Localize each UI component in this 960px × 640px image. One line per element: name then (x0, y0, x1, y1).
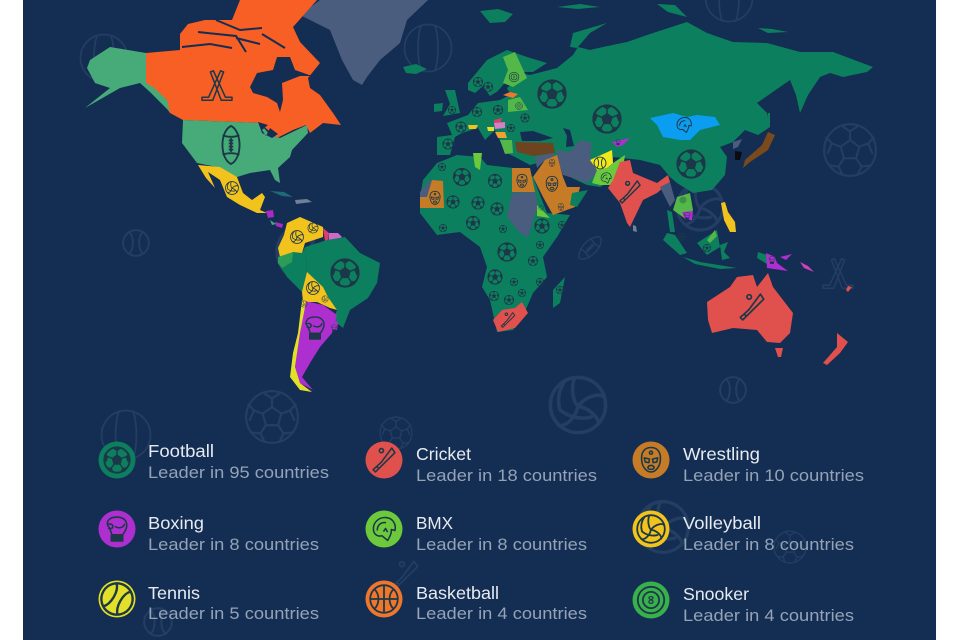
icon: american football (222, 126, 240, 164)
region: Alaska (85, 47, 170, 112)
region: Sakhalin (767, 113, 770, 128)
region: Brazil (305, 237, 380, 328)
region: South Africa (493, 302, 528, 332)
region: Arabia (533, 155, 580, 215)
region: Oman (570, 190, 588, 207)
wrestling icons (430, 159, 564, 211)
legend item: Football: Football (148, 441, 214, 461)
region: Japan (743, 132, 775, 168)
region: Myanmar (660, 182, 675, 207)
region: Scandinavia (468, 50, 547, 96)
legend item: Basketball: Basketball (416, 583, 499, 603)
region: Uruguay (331, 320, 338, 330)
snooker icons (509, 72, 686, 203)
region: New Zealand (823, 333, 848, 365)
BMX icons (539, 117, 691, 211)
region: Western Sahara (420, 180, 432, 197)
region: Philippines (721, 202, 736, 232)
region: Mexico (198, 165, 267, 213)
region: Southeast Asia (663, 193, 814, 272)
map sport icons (202, 71, 775, 339)
region: Canada (146, 0, 341, 138)
region: Bolivia Paraguay (302, 272, 337, 310)
world map (85, 0, 873, 392)
legend item: Cricket: Leader in 18 countries (416, 466, 597, 485)
region: Sri Lanka (633, 225, 637, 232)
region: Afghanistan (590, 150, 613, 170)
legend item: Snooker (632, 582, 854, 625)
region: Greenland (300, 0, 428, 85)
region: Argentina (295, 301, 337, 390)
legend item: Basketball (366, 580, 587, 623)
legend (96, 441, 864, 625)
legend item: Volleyball: Leader in 8 countries (683, 535, 854, 554)
legend item: Football: Leader in 95 countries (148, 463, 329, 482)
legend item: BMX: Leader in 8 countries (416, 535, 587, 554)
tennis icon (594, 157, 606, 169)
region: Baltics (503, 92, 518, 98)
region: Mongolia (650, 113, 720, 140)
region: India (608, 160, 670, 227)
region: Iraq Syria (535, 153, 557, 168)
region: Arctic islands (403, 4, 788, 74)
region: North Korea (733, 139, 742, 149)
region: Eurasia (437, 22, 873, 193)
legend item: Wrestling: Wrestling (683, 444, 760, 464)
region: Balkans (468, 118, 513, 154)
region: Pakistan (592, 155, 625, 185)
Great Lakes (258, 122, 278, 138)
legend item: BMX: BMX (416, 513, 453, 533)
region: Ukraine (508, 97, 528, 112)
region: Peru (278, 247, 307, 293)
region: Tunisia (473, 153, 482, 170)
legend item: Wrestling: Leader in 10 countries (683, 466, 864, 485)
region: Central America (266, 210, 283, 228)
region: United Kingdom and Ireland (434, 90, 460, 116)
cricket icons (501, 181, 764, 327)
legend item: Volleyball (632, 510, 854, 554)
region: Horn (537, 205, 550, 218)
region: Kyrgyzstan (612, 138, 630, 147)
region: Caribbean (270, 191, 312, 204)
legend item: Basketball: Leader in 4 countries (416, 604, 587, 623)
legend item: Cricket (366, 442, 597, 485)
football icons (331, 77, 711, 305)
region: Madagascar (553, 277, 565, 308)
region: Africa (420, 155, 570, 332)
region: Turkey (515, 142, 555, 156)
region: Iran (557, 140, 597, 183)
legend item: Boxing: Boxing (148, 513, 204, 533)
legend item: BMX (366, 510, 587, 554)
region: South Korea (735, 151, 742, 160)
legend item: Volleyball: Volleyball (683, 513, 761, 533)
legend item: Tennis: Leader in 5 countries (148, 604, 319, 623)
region: Chile (290, 300, 312, 392)
region: Fiji (846, 286, 852, 292)
legend item: Wrestling (632, 442, 864, 485)
region: Guianas (323, 228, 342, 242)
region: Sudan (507, 192, 538, 237)
region: Mauritania (420, 180, 444, 208)
region: Australia (707, 273, 793, 343)
legend item: Snooker: Snooker (683, 584, 749, 604)
volleyball icons (226, 182, 328, 307)
region: USA (182, 120, 308, 183)
legend item: Snooker: Leader in 4 countries (683, 606, 854, 625)
region: Ecuador (278, 252, 293, 268)
legend item: Cricket: Cricket (416, 444, 471, 464)
boxing icons (306, 139, 775, 339)
legend item: Football (98, 441, 329, 482)
Black Sea, Caspian and Baltic (490, 88, 574, 147)
legend item: Tennis: Tennis (148, 583, 200, 603)
icon: hockey sticks (202, 71, 232, 100)
legend item: Boxing: Leader in 8 countries (148, 535, 319, 554)
region: Colombia Venezuela (278, 217, 323, 257)
legend item: Tennis (96, 578, 319, 623)
arctic channels (182, 20, 285, 52)
legend item: Boxing (98, 510, 319, 554)
region: Egypt (512, 168, 535, 192)
region: Finland (503, 52, 527, 87)
Hudson Bay (250, 57, 312, 112)
region: Tasmania (775, 348, 783, 357)
